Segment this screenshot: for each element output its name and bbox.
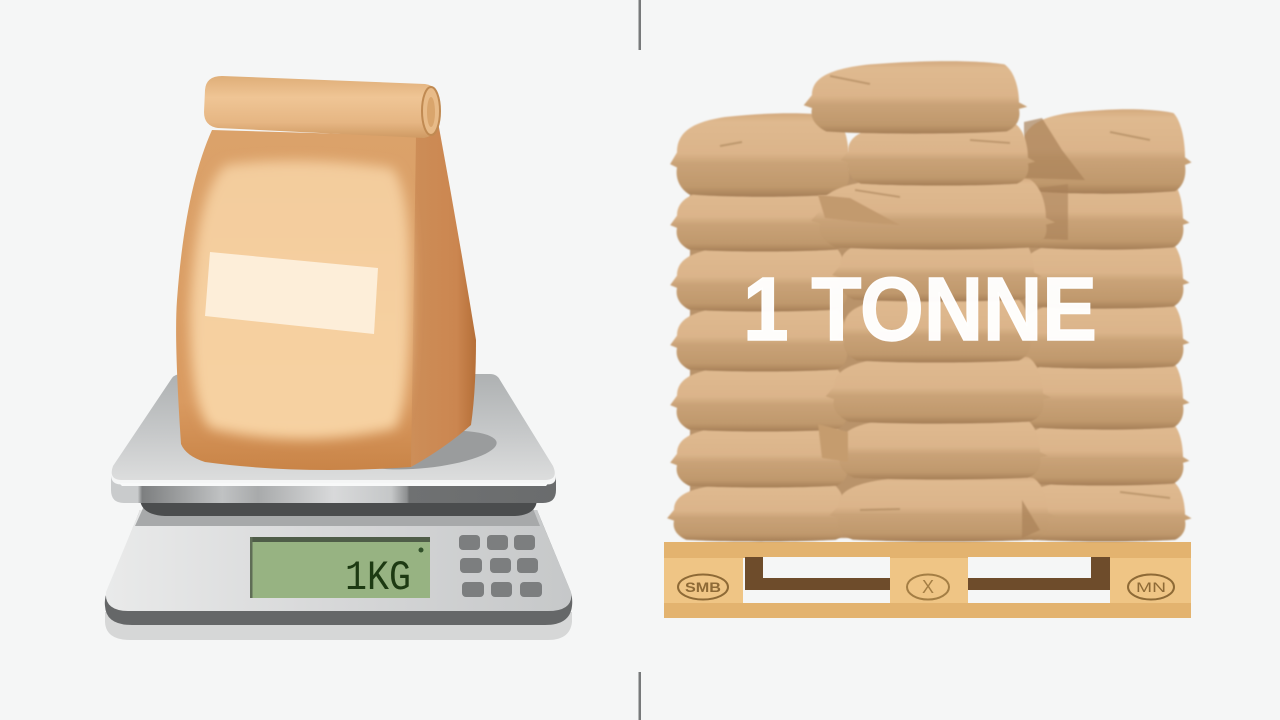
panel: 1 kg bag on a kitchen scale xyxy=(105,76,572,640)
lcd reading: 1KG xyxy=(345,554,411,602)
scale base body xyxy=(105,510,572,625)
pallet stamp: centre xyxy=(907,574,949,600)
sacks: right column xyxy=(1015,109,1192,542)
bag shadow on platform xyxy=(352,425,498,475)
sacks: left column xyxy=(667,113,856,542)
pallet stamp: right xyxy=(1128,574,1174,600)
icon: digital scale xyxy=(105,374,572,640)
bag label xyxy=(205,252,378,334)
scale plate underside xyxy=(140,500,537,516)
pallet blocks xyxy=(664,558,1191,605)
icon: wooden pallet xyxy=(664,542,1191,618)
bag side gusset xyxy=(411,122,476,467)
pallet stamp: left: SMB xyxy=(685,579,721,595)
sack stack backing xyxy=(690,170,1175,538)
pallet stamp: centre: X xyxy=(922,577,934,597)
pallet openings xyxy=(745,557,1110,604)
bag rolled top xyxy=(204,76,440,138)
panel: 1 tonne pallet of sacks xyxy=(664,61,1192,618)
bag front xyxy=(176,130,416,470)
pallet stamp: left xyxy=(678,574,728,600)
keypad buttons xyxy=(459,535,542,597)
icon: paper bag xyxy=(176,76,476,470)
scale base shadow xyxy=(105,612,572,640)
pallet bottom board xyxy=(664,603,1191,618)
sacks: middle column xyxy=(720,61,1170,542)
pallet top board xyxy=(664,542,1191,558)
lcd display xyxy=(250,537,430,602)
pallet stamp: right: MN xyxy=(1136,579,1166,595)
scale platform xyxy=(111,374,556,503)
heading: 1 TONNE: 1 TONNE xyxy=(743,260,1097,360)
